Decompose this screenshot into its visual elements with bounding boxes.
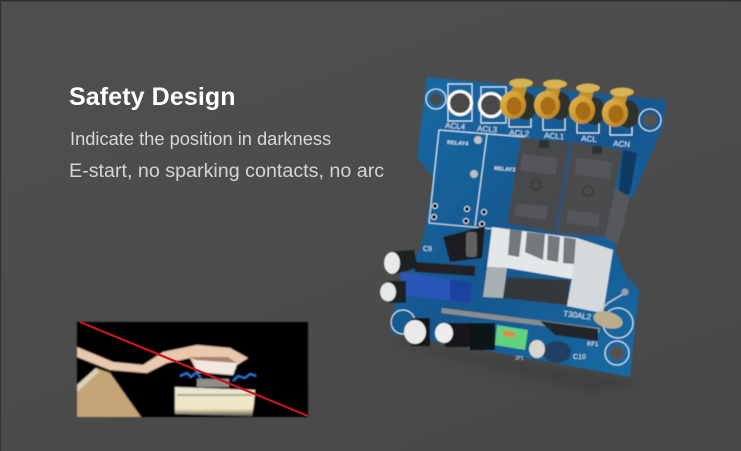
transistor	[503, 277, 570, 305]
left bottom capacitors	[404, 318, 430, 346]
board labels: ACL2	[509, 128, 530, 138]
red strike line	[80, 322, 308, 416]
heat sink fin gaps	[508, 229, 576, 264]
blue trimmer	[400, 272, 472, 303]
copper arm	[77, 345, 248, 375]
board labels	[423, 121, 631, 362]
antenna coil	[594, 293, 625, 316]
text: e-start feature: E-start, no sparking contacts, no arc	[69, 160, 384, 182]
title: Safety Design	[69, 83, 236, 111]
header pins	[415, 262, 475, 276]
green connector	[495, 325, 528, 350]
board labels: JP1	[515, 356, 524, 362]
board labels: RELAY4	[447, 140, 469, 148]
pcb outline	[390, 77, 666, 377]
board labels: ACL3	[477, 124, 498, 134]
board labels: C9	[423, 246, 432, 253]
board labels: ACN	[613, 139, 631, 149]
terminal ACL3	[480, 94, 502, 116]
via holes	[432, 204, 486, 226]
text: position indicator feature: Indicate the position in darkness	[70, 128, 331, 149]
terminal ACL4	[448, 92, 472, 114]
board labels: ACL1	[544, 131, 565, 141]
silkscreen	[391, 84, 661, 365]
relay 2	[557, 142, 623, 237]
capacitor C9	[384, 250, 418, 274]
wedge base	[77, 368, 141, 417]
electric arcs	[180, 372, 256, 381]
board labels: RELAY3	[494, 166, 515, 173]
brass terminals	[500, 78, 639, 128]
contact photo with strike-through	[77, 322, 308, 417]
screw holes	[430, 93, 442, 105]
board labels: T30AL2	[563, 309, 592, 322]
board labels: RF1	[587, 342, 599, 348]
capacitor C10	[529, 340, 571, 363]
board labels: ACL	[581, 134, 598, 144]
board labels: ACL4	[445, 121, 466, 131]
heat sink foot	[483, 267, 507, 298]
relay control board	[380, 77, 666, 377]
strip connector	[441, 308, 600, 333]
board labels: C10	[573, 354, 586, 361]
relay 1	[507, 138, 570, 233]
capacitor small	[380, 281, 406, 303]
board shadow	[392, 338, 640, 392]
insulator block	[175, 387, 255, 416]
D-type diode	[443, 226, 485, 262]
pin socket	[470, 323, 495, 350]
heat sink	[483, 227, 613, 313]
relay markings	[514, 154, 612, 227]
contact head	[193, 358, 237, 375]
relay shadow	[618, 150, 637, 200]
